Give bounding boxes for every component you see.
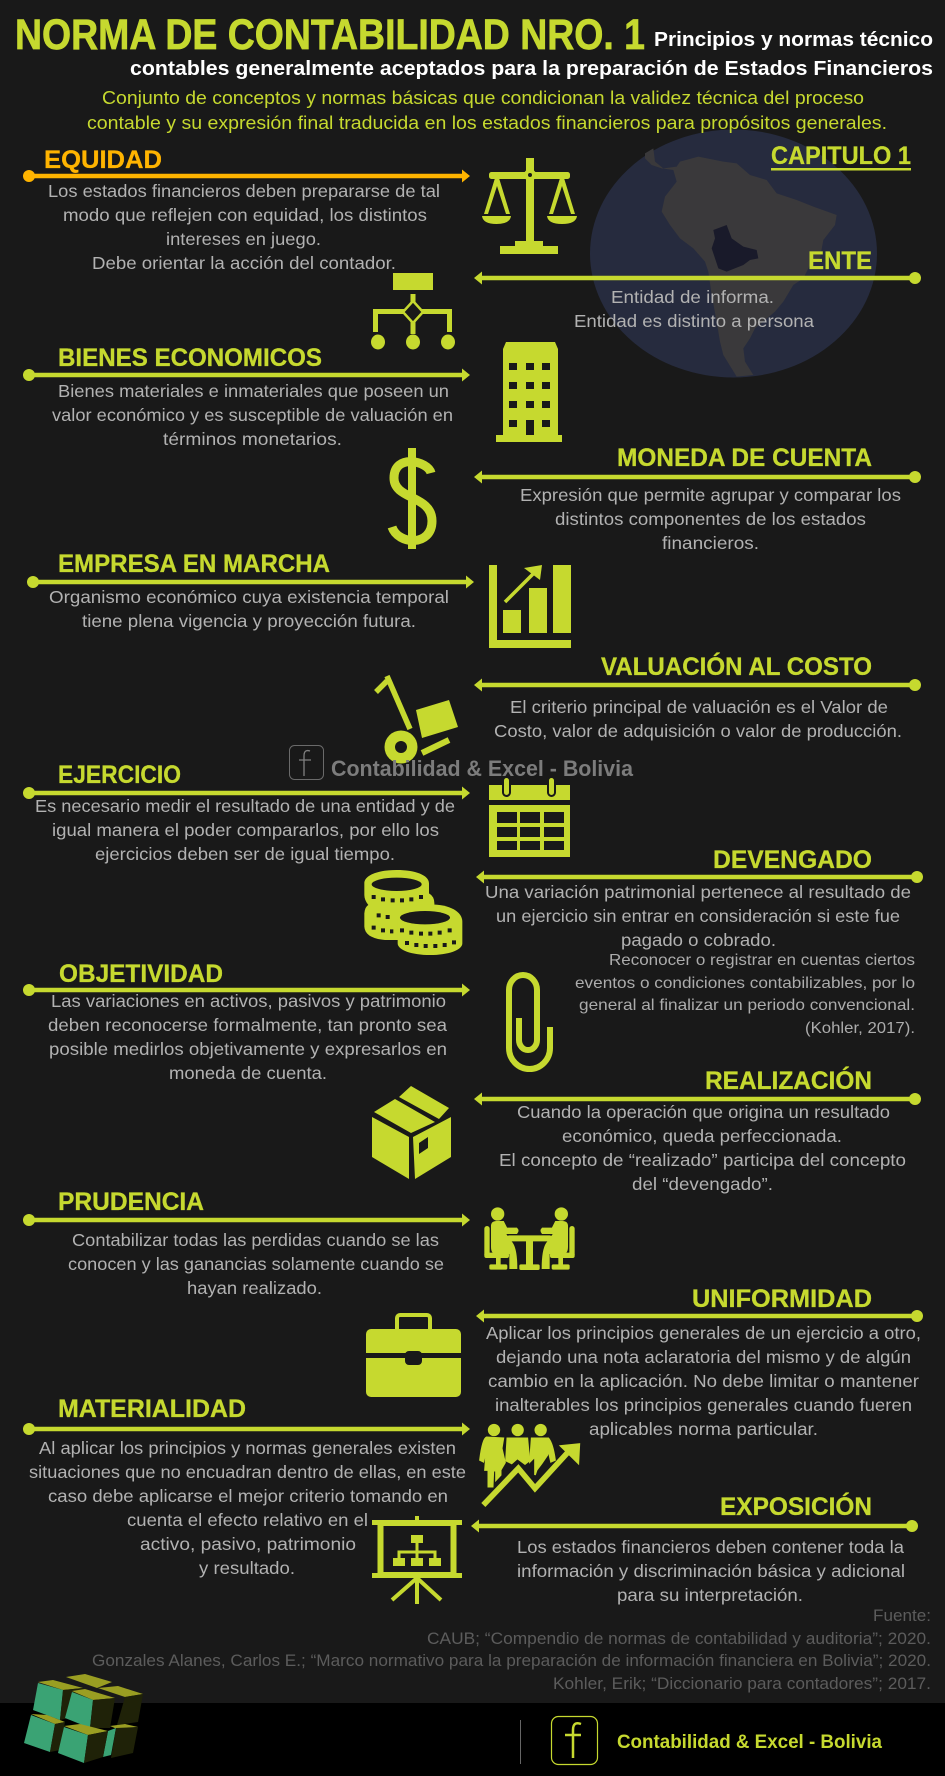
arrow (27, 576, 474, 588)
subtitle: Principios y normas técnico (654, 28, 933, 51)
body text: Una variación patrimonial pertenece al resultado de (485, 882, 911, 902)
body text: Los estados financieros deben contener toda la (517, 1537, 904, 1557)
body text: posible medirlos objetivamente y expresarlos en (49, 1039, 447, 1059)
heading: EQUIDAD (44, 146, 162, 174)
icon: growth chart (489, 565, 571, 648)
title: NORMA DE CONTABILIDAD NRO. 1 (15, 11, 645, 59)
arrow (474, 272, 921, 284)
panel: uniformidad (366, 1285, 923, 1439)
arrow (476, 1310, 923, 1322)
arrow (474, 470, 921, 484)
body text: caso debe aplicarse el mejor criterio tomando en (48, 1486, 448, 1506)
arrow (23, 1214, 470, 1226)
icon: hand truck (376, 676, 458, 764)
panel: ejercicio (23, 761, 570, 864)
body text: Costo, valor de adquisición o valor de producción. (494, 721, 902, 741)
icon: people and rising arrow (480, 1425, 579, 1505)
arrow (474, 678, 921, 692)
body text: Cuando la operación que origina un resultado (517, 1102, 890, 1122)
body text: Es necesario medir el resultado de una entidad y de (35, 796, 455, 816)
definition note: eventos o condiciones contabilizables, por lo (575, 975, 915, 992)
body text: tiene plena vigencia y proyección futura. (82, 611, 416, 631)
body text: inalterables los principios generales cuando fueren (495, 1395, 912, 1415)
body text: modo que reflejen con equidad, los distintos (63, 205, 427, 225)
definition note: general al finalizar un periodo convencional. (579, 997, 915, 1014)
panel: materialidad (23, 1395, 579, 1578)
body text (52, 381, 453, 449)
subtitle: contables generalmente aceptados para la preparación de Estados Financieros (130, 57, 933, 80)
watermark: Contabilidad & Excel - Bolivia (331, 756, 634, 781)
chapter label: CAPITULO 1 (771, 142, 911, 170)
icon: dollar sign (392, 448, 432, 549)
footer divider (520, 1720, 521, 1764)
arrow (476, 870, 923, 884)
body text: Contabilizar todas las perdidas cuando se las (72, 1230, 439, 1250)
heading: MONEDA DE CUENTA (617, 444, 872, 472)
body text: intereses en juego. (166, 229, 321, 249)
body text: Al aplicar los principios y normas generales existen (39, 1438, 456, 1458)
body text: información y discriminación básica y adicional (517, 1561, 905, 1581)
body text: ejercicios deben ser de igual tiempo. (95, 844, 395, 864)
body text: El criterio principal de valuación es el Valor de (510, 697, 888, 717)
panel: valuacion al costo (376, 651, 921, 764)
arrow (23, 170, 470, 182)
icon: organization tree (371, 273, 455, 350)
body text: situaciones que no encuadran dentro de ellas, en este (29, 1462, 466, 1482)
icon: box (372, 1086, 451, 1179)
body text: valor económico y es susceptible de valuación en (52, 405, 453, 425)
sources: Gonzales Alanes, Carlos E.; “Marco normativo para la preparación de información financiera en Bolivia”; 2020. (92, 1652, 931, 1670)
heading: PRUDENCIA (58, 1188, 204, 1216)
body text: cambio en la aplicación. No debe limitar o mantener (488, 1371, 919, 1391)
body text: Las variaciones en activos, pasivos y patrimonio (51, 991, 446, 1011)
body text (494, 697, 902, 741)
body text (517, 1537, 905, 1605)
heading: EMPRESA EN MARCHA (58, 550, 330, 578)
body text: Bienes materiales e inmateriales que poseen un (58, 381, 449, 401)
body text: Aplicar los principios generales de un ejercicio a otro, (486, 1323, 921, 1343)
icon: building (496, 342, 562, 442)
definition note: (Kohler, 2017). (805, 1020, 915, 1037)
intro text: Conjunto de conceptos y normas básicas que condicionan la validez técnica del proceso (102, 87, 864, 108)
body text (485, 882, 911, 950)
definition note: Reconocer o registrar en cuentas ciertos (609, 952, 915, 969)
body text: distintos componentes de los estados (555, 509, 866, 529)
heading: BIENES ECONOMICOS (58, 344, 322, 372)
icon: meeting at table (485, 1208, 574, 1269)
body text (520, 485, 901, 553)
panel: devengado (364, 846, 923, 1037)
heading: OBJETIVIDAD (59, 960, 223, 988)
body text: términos monetarios. (163, 429, 342, 449)
definition note (575, 952, 915, 1037)
sources: Fuente: (873, 1607, 931, 1625)
body text (499, 1102, 906, 1194)
arrow (474, 1092, 921, 1106)
heading: EJERCICIO (58, 761, 181, 789)
footer facebook icon (552, 1716, 598, 1764)
body text: pagado o cobrado. (621, 930, 776, 950)
body text: hayan realizado. (187, 1278, 322, 1298)
body text: del “devengado”. (632, 1174, 773, 1194)
heading: MATERIALIDAD (58, 1395, 246, 1423)
heading: UNIFORMIDAD (692, 1285, 872, 1313)
body text (68, 1230, 444, 1298)
body text: conocen y las ganancias solamente cuando se (68, 1254, 444, 1274)
body text (35, 796, 455, 864)
icon: paperclip (509, 975, 550, 1069)
body text: Los estados financieros deben prepararse de tal (48, 181, 440, 201)
icon: briefcase (366, 1315, 461, 1397)
panel: realizacion (372, 1065, 921, 1194)
panel: ente (371, 247, 921, 350)
body text (48, 991, 447, 1083)
sources: CAUB; “Compendio de normas de contabilidad y auditoria”; 2020. (427, 1630, 931, 1648)
body text: un ejercicio sin entrar en consideración si este fue (496, 906, 900, 926)
arrow (23, 368, 470, 382)
icon: scales (482, 158, 577, 254)
panel: equidad (23, 146, 577, 273)
arrow (23, 984, 470, 996)
body text: moneda de cuenta. (169, 1063, 327, 1083)
body text: Expresión que permite agrupar y comparar los (520, 485, 901, 505)
body text (29, 1438, 466, 1578)
globe background with South America map (590, 130, 877, 378)
body text: Entidad de informa. (611, 287, 774, 307)
watermark (290, 746, 634, 781)
heading: REALIZACIÓN (705, 1065, 872, 1095)
subtitle (130, 28, 933, 80)
panel: empresa en marcha (27, 550, 571, 648)
body text: económico, queda perfeccionada. (562, 1126, 842, 1146)
body text: Organismo económico cuya existencia temporal (49, 587, 449, 607)
footer page name: Contabilidad & Excel - Bolivia (617, 1732, 882, 1753)
intro text (87, 87, 887, 133)
icon: calendar (489, 777, 570, 857)
body text: cuenta el efecto relativo en el (127, 1510, 368, 1530)
arrow (23, 786, 470, 800)
body text: para su interpretación. (617, 1585, 803, 1605)
panel: prudencia (23, 1188, 574, 1298)
icon: coins (364, 870, 462, 955)
icon: presentation board (372, 1516, 462, 1604)
body text: deben reconocerse formalmente, tan pronto sea (48, 1015, 447, 1035)
panel: bienes economicos (23, 342, 562, 449)
body text: igual manera el poder compararlos, por ello los (52, 820, 439, 840)
intro text: contable y su expresión final traducida en los estados financieros para propósitos generales. (87, 112, 887, 133)
body text: activo, pasivo, patrimonio (140, 1534, 356, 1554)
body text (48, 181, 440, 273)
panel: objetividad (23, 960, 550, 1083)
body text: El concepto de “realizado” participa del concepto (499, 1150, 906, 1170)
heading: EXPOSICIÓN (720, 1491, 872, 1521)
body text (574, 287, 814, 331)
heading: VALUACIÓN AL COSTO (601, 651, 872, 681)
body text (486, 1323, 921, 1439)
footer band (0, 1703, 945, 1776)
logo: green cubes (24, 1674, 143, 1763)
body text: financieros. (662, 533, 759, 553)
heading: ENTE (808, 247, 872, 275)
panel: moneda de cuenta (392, 444, 921, 553)
body text: Entidad es distinto a persona (574, 311, 814, 331)
body text (49, 587, 449, 631)
heading: DEVENGADO (713, 846, 872, 874)
sources: Kohler, Erik; “Diccionario para contadores”; 2017. (553, 1675, 931, 1693)
body text: dejando una nota aclaratoria del mismo y de algún (496, 1347, 911, 1367)
body text: Debe orientar la acción del contador. (92, 253, 396, 273)
panel: exposicion (372, 1491, 918, 1605)
arrow (23, 1422, 470, 1436)
body text: aplicables norma particular. (589, 1419, 818, 1439)
arrow (471, 1520, 918, 1532)
sources (92, 1607, 931, 1693)
body text: y resultado. (199, 1558, 295, 1578)
